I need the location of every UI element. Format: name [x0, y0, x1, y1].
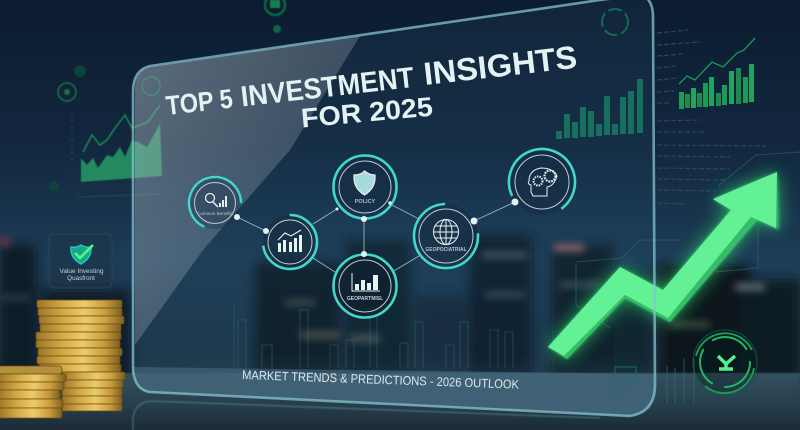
- value investing card: Quasfront: [67, 275, 95, 282]
- gold coins: large stack: [36, 300, 125, 411]
- node 4: bottom bar chart: [333, 254, 397, 318]
- node 3: policy: [333, 155, 397, 219]
- glass panel: [133, 0, 655, 416]
- title: [164, 39, 579, 133]
- value investing card: [49, 234, 112, 288]
- connector dots: [234, 198, 518, 257]
- panel bottom band: [133, 367, 655, 416]
- ground surface: [0, 373, 800, 430]
- icon: shield with check: [71, 245, 93, 264]
- faint outline chart under arrow: [667, 358, 694, 404]
- connector lines: [237, 202, 515, 272]
- circuit outline behind arrow: [576, 152, 800, 328]
- node 1: common benefits: Common Benefits: [197, 211, 234, 216]
- background data text lines: [657, 30, 766, 204]
- rising green arrow: [548, 172, 779, 359]
- title: FOR 2025: [300, 92, 434, 133]
- panel edge highlight: [133, 0, 655, 416]
- green circular currency icon: [693, 330, 757, 394]
- title: INSIGHTS: [422, 39, 579, 92]
- node 4: bottom bar chart: GEOPARTMISL: [347, 296, 383, 302]
- card text: Value Investing: [60, 268, 104, 275]
- diagonal glare: [135, 36, 360, 345]
- title: INVESTMENT: [239, 62, 416, 113]
- green arrow glow: [548, 172, 779, 359]
- faint chart icon near bottom right: [607, 367, 636, 400]
- node 1: common benefits: [180, 168, 250, 238]
- title: TOP 5: [164, 84, 234, 121]
- node 5: globe: [411, 201, 481, 271]
- subtitle: MARKET TRENDS & PREDICTIONS - 2026 OUTLOOK: [242, 368, 520, 392]
- panel reflection on the ground: [133, 401, 600, 430]
- node 2: growth chart: [263, 215, 317, 269]
- faint bars inside panel: [142, 9, 643, 139]
- node 3: policy: POLICY: [355, 199, 376, 205]
- left background area chart: [49, 0, 285, 197]
- blurred city skyline: [0, 235, 800, 380]
- node 5: globe: GEOPOCIATRIAL: [425, 247, 467, 253]
- blurred city lights: [0, 238, 765, 342]
- right background bar chart with line: [679, 38, 755, 109]
- outlined bars at base: [234, 305, 513, 368]
- gold coins: small stack: [0, 366, 66, 418]
- node 6: head with gears: [498, 138, 586, 226]
